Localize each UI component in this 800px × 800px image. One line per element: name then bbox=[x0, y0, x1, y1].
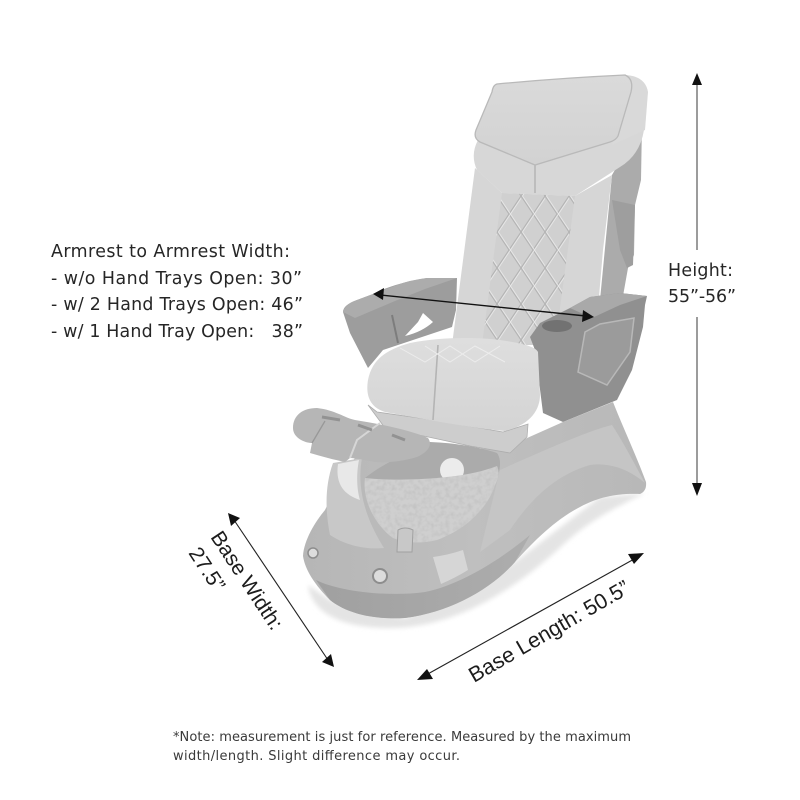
text: height bbox=[668, 261, 736, 307]
footnote bbox=[173, 730, 631, 764]
footrest support bbox=[327, 458, 384, 548]
footrest bbox=[293, 408, 430, 462]
seat cushion bbox=[367, 338, 540, 431]
text: height: Height: bbox=[668, 261, 733, 281]
text: base width: Base Width: bbox=[206, 527, 287, 634]
text: armrest to armrest width bbox=[51, 242, 303, 342]
text: height: 55”-56” bbox=[668, 287, 736, 307]
seat skirt bbox=[368, 405, 528, 453]
chair back shell bbox=[600, 123, 642, 300]
arrow: height bbox=[692, 73, 702, 496]
headrest lower bolster bbox=[474, 115, 646, 196]
text: armrest to armrest width: - w/ 2 Hand Trays Open: 46” bbox=[51, 295, 303, 315]
lower back cushion bbox=[452, 168, 612, 345]
side window bbox=[578, 318, 634, 385]
arrow: base length bbox=[417, 553, 644, 680]
floor shadow bbox=[308, 493, 645, 628]
text: armrest to armrest width: - w/ 1 Hand Tray Open: 38” bbox=[51, 322, 303, 342]
text: base length: Base Length: 50.5” bbox=[464, 576, 634, 687]
base ridge highlight bbox=[480, 425, 645, 552]
text: base width: 27.5” bbox=[184, 543, 229, 596]
rim highlight bbox=[433, 550, 468, 584]
illustration: pedicure chair bbox=[293, 75, 648, 628]
base lower band bbox=[316, 535, 530, 618]
headrest cushion bbox=[475, 75, 648, 165]
arrow: armrest width bbox=[373, 288, 594, 322]
text: armrest to armrest width: Armrest to Armrest Width: bbox=[51, 242, 290, 262]
arrow: base width bbox=[228, 513, 334, 667]
right armrest bbox=[530, 293, 647, 422]
glass bowl bbox=[365, 442, 500, 552]
base shell bbox=[303, 402, 646, 618]
text: armrest to armrest width: - w/o Hand Trays Open: 30” bbox=[51, 269, 302, 289]
footnote: *Note: measurement is just for reference. Measured by the maximum bbox=[173, 730, 631, 745]
footnote: width/length. Slight difference may occur. bbox=[173, 749, 460, 764]
cup holder bbox=[542, 320, 572, 332]
left armrest bbox=[343, 278, 457, 368]
control buttons bbox=[308, 548, 387, 583]
diamond stitched centre panel bbox=[484, 193, 574, 345]
